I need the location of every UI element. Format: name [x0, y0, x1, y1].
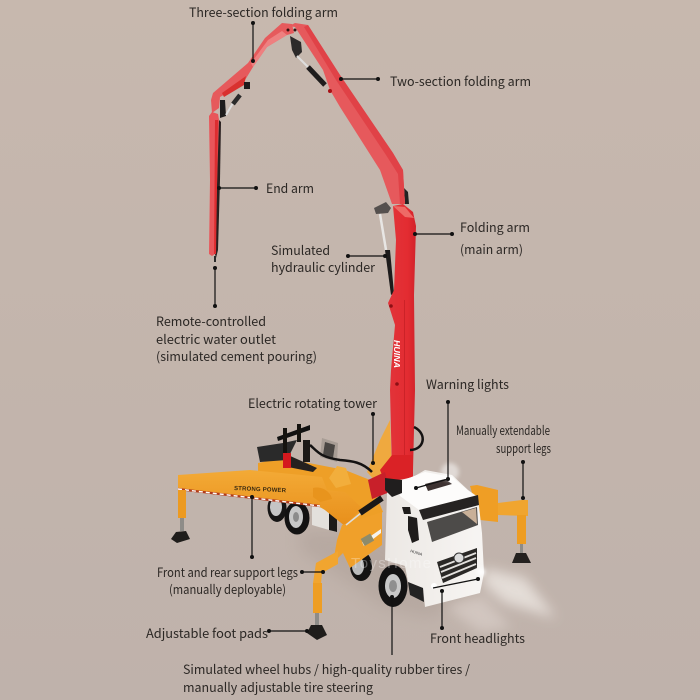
callout lines — [215, 23, 523, 655]
white truck cab: HUINA — [410, 548, 423, 557]
headlight glow beams — [445, 568, 556, 632]
label: folding arm main arm: (main arm) — [460, 239, 523, 258]
brand lettering: HUINA — [392, 340, 402, 368]
label: simulated hydraulic cylinder — [271, 240, 375, 276]
boom: two-section folding arm — [286, 23, 409, 204]
rear outrigger beam — [171, 466, 362, 543]
label: remote-controlled water outlet: electric water outlet — [156, 329, 276, 348]
white truck cab — [385, 470, 484, 607]
watermark: ToysHome — [351, 555, 431, 572]
label: simulated hydraulic cylinder: Simulated — [271, 240, 330, 259]
label: two-section folding arm: Two-section folding arm — [390, 71, 531, 90]
label: remote-controlled water outlet: (simulated cement pouring) — [156, 346, 317, 365]
orange deck — [258, 458, 383, 526]
label: front and rear support legs: Front and rear support legs — [157, 562, 298, 581]
label: warning lights: Warning lights — [426, 374, 509, 393]
rotating tower base — [368, 455, 413, 499]
sun visor — [419, 495, 479, 520]
callout end dots — [213, 21, 525, 633]
label: manually extendable support legs: support legs — [496, 438, 551, 457]
front wheel — [378, 565, 408, 607]
ground shadow under truck — [300, 530, 470, 618]
label: adjustable foot pads: Adjustable foot pads — [146, 623, 268, 642]
roof light bar — [425, 479, 452, 491]
windshield — [427, 507, 478, 542]
label: wheel hubs and tires: manually adjustable tire steering — [183, 677, 373, 696]
label: front and rear support legs — [157, 562, 298, 598]
front outrigger — [307, 512, 382, 640]
text labels — [146, 2, 551, 696]
label: electric rotating tower: Electric rotating tower — [248, 393, 377, 412]
orange mast wedge behind arm — [367, 420, 392, 482]
boom: end arm — [209, 112, 221, 262]
label: remote-controlled water outlet: Remote-controlled — [156, 311, 266, 330]
far side support leg — [470, 485, 531, 563]
grille — [437, 548, 477, 583]
headlight — [431, 583, 437, 589]
strong power lettering: STRONG POWER — [234, 486, 287, 494]
label: wheel hubs and tires — [183, 659, 470, 696]
wheel arch fairing — [408, 582, 424, 602]
label: folding arm main arm — [460, 217, 530, 258]
label: wheel hubs and tires: Simulated wheel hubs / high-quality rubber tires / — [183, 659, 470, 678]
label: simulated hydraulic cylinder: hydraulic cylinder — [271, 257, 375, 276]
label: manually extendable support legs — [456, 420, 551, 457]
headlight sparkle — [477, 568, 485, 576]
rear equipment on deck — [257, 424, 423, 472]
label: end arm: End arm — [266, 178, 314, 197]
mirror — [402, 507, 419, 543]
logo badge — [454, 553, 464, 563]
outrigger ram — [346, 498, 382, 525]
boom: main folding arm with brand — [388, 204, 416, 472]
boom: hydraulic cylinder — [374, 202, 394, 295]
label: manually extendable support legs: Manually extendable — [456, 420, 550, 439]
label: folding arm main arm: Folding arm — [460, 217, 530, 236]
label: three-section folding arm: Three-section folding arm — [189, 2, 338, 21]
label: front headlights: Front headlights — [430, 628, 525, 647]
label: front and rear support legs: (manually deployable) — [169, 579, 286, 598]
label: remote-controlled water outlet — [156, 311, 317, 365]
boom: three-section arm with joint and cylinder — [211, 23, 294, 118]
truck chassis battery box — [312, 505, 337, 532]
warning light glow — [441, 463, 459, 481]
second axle wheel — [350, 551, 372, 581]
rear wheels — [268, 494, 310, 534]
